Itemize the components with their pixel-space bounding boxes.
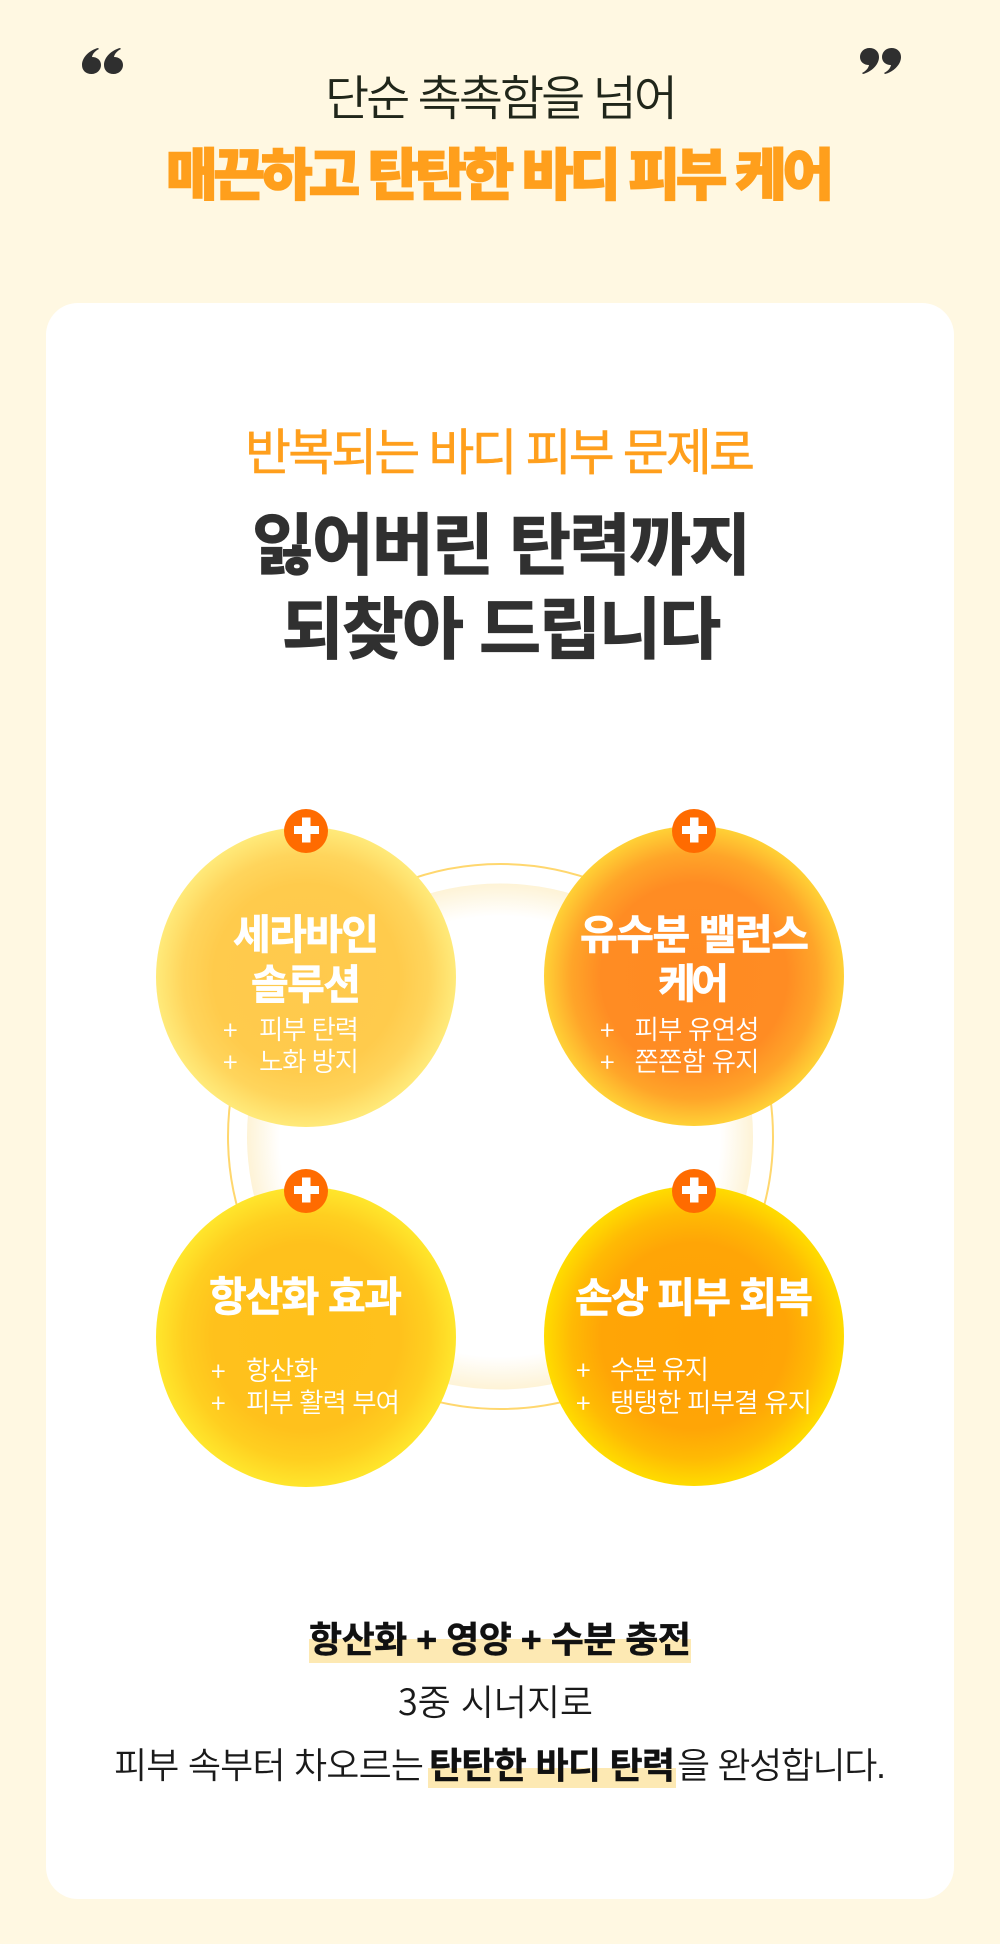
diagram: ring behind circles bbox=[228, 864, 773, 1409]
circle: ceramide solution: 노화 방지 bbox=[259, 1047, 359, 1077]
circle: oil-moisture balance care: + bbox=[600, 1009, 615, 1048]
circle: oil-moisture balance care: 피부 유연성 bbox=[634, 1015, 760, 1045]
title line: intro: 단순 촉촉함을 넘어 bbox=[325, 73, 678, 126]
badge: plus bbox=[672, 809, 716, 853]
icon: opening quotation mark bbox=[82, 48, 123, 74]
main heading: 잃어버린 탄력까지 bbox=[252, 509, 751, 584]
circle: ceramide solution: 세라바인 bbox=[233, 912, 379, 958]
circle: oil-moisture balance care: 유수분 밸런스 bbox=[580, 912, 809, 958]
badge: plus bbox=[284, 809, 328, 853]
circle: damaged skin recovery: 수분 유지 bbox=[610, 1355, 709, 1385]
closing text: synergy line: 3중 시너지로 bbox=[398, 1674, 593, 1726]
closing text: final sentence: 탄탄한 바디 탄력 bbox=[429, 1745, 675, 1786]
circle: ceramide solution: 피부 탄력 bbox=[259, 1015, 359, 1045]
circle: ceramide solution: + bbox=[223, 1009, 238, 1048]
badge: plus bbox=[672, 1169, 716, 1213]
circle: oil-moisture balance care bbox=[544, 809, 844, 1126]
title line: highlighted: 매끈하고 탄탄한 바디 피부 케어 bbox=[166, 144, 834, 207]
main heading: 되찾아 드립니다 bbox=[282, 593, 721, 668]
circle: damaged skin recovery: 손상 피부 회복 bbox=[575, 1275, 813, 1321]
circle: damaged skin recovery bbox=[544, 1169, 844, 1486]
circle: antioxidant effect: 항산화 효과 bbox=[209, 1274, 402, 1320]
circle: antioxidant effect: 항산화 bbox=[246, 1356, 318, 1386]
circle: ceramide solution: 솔루션 bbox=[251, 962, 361, 1008]
closing text: final sentence bbox=[114, 1745, 886, 1788]
circle: damaged skin recovery: 탱탱한 피부결 유지 bbox=[610, 1388, 812, 1418]
circle: antioxidant effect: + bbox=[211, 1382, 226, 1421]
circle: damaged skin recovery: + bbox=[576, 1382, 591, 1421]
circle: antioxidant effect bbox=[156, 1169, 456, 1487]
panel: white card bbox=[46, 303, 954, 1899]
subheading: 반복되는 바디 피부 문제로 bbox=[245, 425, 755, 481]
closing text: final sentence: 피부 속부터 차오르는 bbox=[114, 1745, 424, 1786]
circle: antioxidant effect: + bbox=[211, 1350, 226, 1389]
circle: ceramide solution: + bbox=[223, 1041, 238, 1080]
icon: closing quotation mark bbox=[860, 48, 901, 74]
circle: damaged skin recovery: + bbox=[576, 1349, 591, 1388]
badge: plus bbox=[284, 1169, 328, 1213]
closing text: final sentence: 을 완성합니다. bbox=[677, 1745, 886, 1786]
circle: antioxidant effect: 피부 활력 부여 bbox=[246, 1388, 400, 1418]
circle: ceramide solution bbox=[156, 809, 456, 1127]
closing text: highlighted formula: 항산화 + 영양 + 수분 충전 bbox=[309, 1619, 691, 1660]
circle: oil-moisture balance care: + bbox=[600, 1041, 615, 1080]
circle: oil-moisture balance care: 쫀쫀함 유지 bbox=[634, 1047, 760, 1077]
main heading bbox=[252, 509, 751, 668]
circle: oil-moisture balance care: 케어 bbox=[658, 961, 729, 1007]
